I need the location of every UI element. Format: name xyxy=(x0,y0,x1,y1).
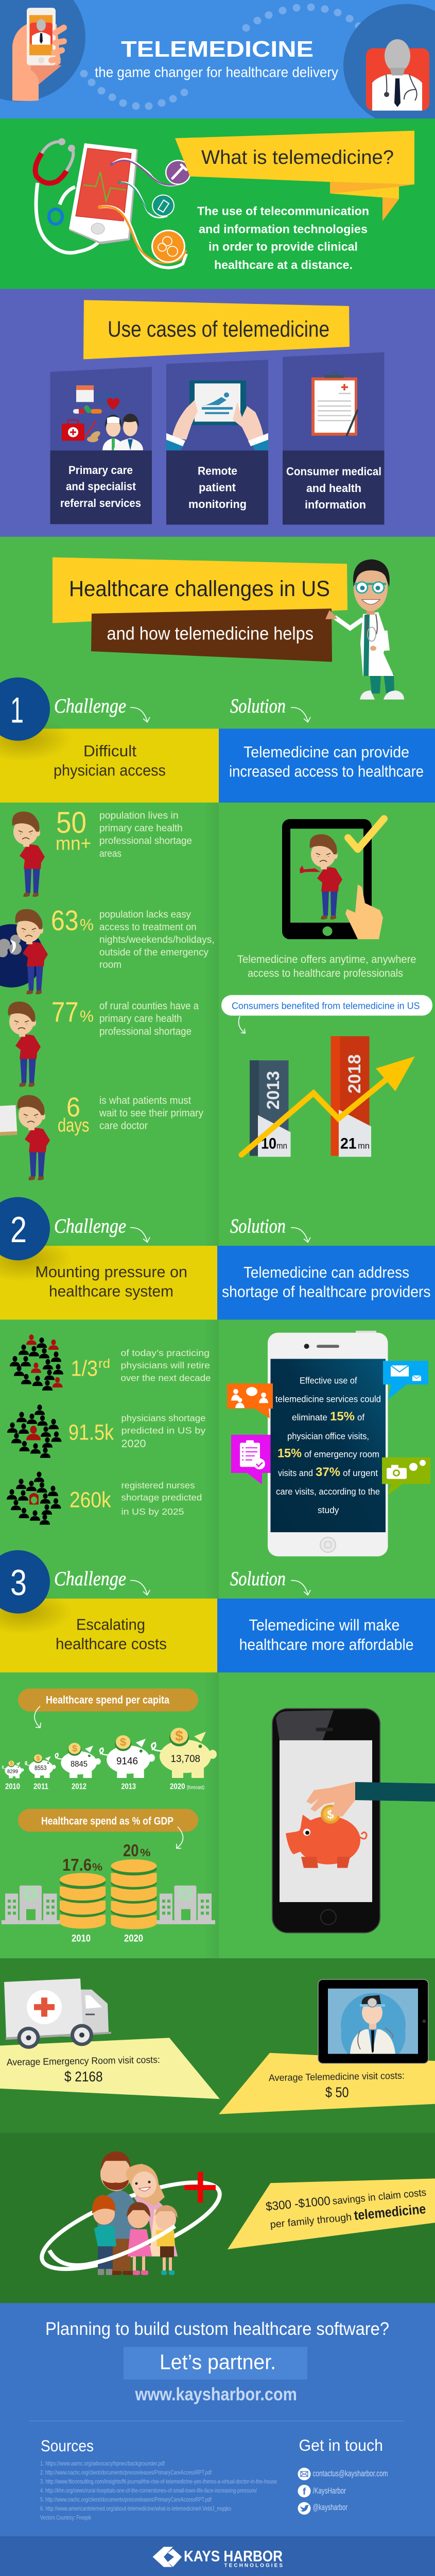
panel: solution 3 xyxy=(217,1599,435,1672)
panel: solution 3: healthcare more affordable xyxy=(239,1636,414,1653)
text: telemedicine offers: Telemedicine offers anytime, anywhere xyxy=(237,953,416,965)
stat: 260k nurses shortage: shortage predicted xyxy=(121,1493,202,1503)
card label: Remote xyxy=(198,464,237,477)
banner: use cases of telemedicine: Use cases of telemedicine xyxy=(108,317,329,342)
icon: hands holding tablet xyxy=(166,380,268,450)
callout: telemedicine cost: $ 50 xyxy=(325,2084,349,2100)
card label xyxy=(60,463,141,510)
phone screen text: of urgent xyxy=(343,1468,378,1478)
card label: information xyxy=(305,498,366,511)
stat: 260k nurses shortage: 260k xyxy=(69,1488,111,1512)
chart: piggy banks per capita spend: 2012 xyxy=(72,1783,86,1791)
card label xyxy=(188,464,247,511)
icon: hospital right xyxy=(156,1886,215,1924)
stat: 6 days: days xyxy=(58,1114,89,1136)
chart: piggy banks per capita spend: 8299 xyxy=(7,1769,18,1774)
stat: 91.5k physicians shortage: predicted in US by xyxy=(121,1426,206,1435)
card label: referral services xyxy=(60,496,141,510)
phone screen text: 15% xyxy=(277,1447,302,1461)
section background: visit costs xyxy=(0,1958,435,2133)
step 3 badge xyxy=(0,1550,50,1614)
section background: call to action xyxy=(0,2303,435,2536)
stat: 63%: % xyxy=(80,916,94,934)
stat: 6 days xyxy=(0,1093,204,1180)
chart: piggy banks per capita spend: $ xyxy=(72,1743,77,1753)
chart: GDP coin stacks with hospitals xyxy=(2,1842,215,1944)
icon: primary care collage xyxy=(62,385,143,450)
chart: consumers 2013 vs 2018: mn xyxy=(358,1141,370,1150)
stat: 91.5k physicians shortage: 2020 xyxy=(121,1437,146,1450)
definition text: The use of telecommunication xyxy=(197,205,369,218)
stat: 1/3rd of physicians: rd xyxy=(98,1357,110,1371)
chart: GDP coin stacks with hospitals: 2010 xyxy=(72,1933,91,1944)
panel: solution 3: Telemedicine will make xyxy=(249,1617,400,1634)
card label xyxy=(286,465,381,511)
phone screen text: Effective use of xyxy=(300,1376,357,1385)
website: www.kaysharbor.com xyxy=(135,2384,297,2404)
card label: Primary care xyxy=(68,463,133,477)
chart: consumers 2013 vs 2018: 21 xyxy=(340,1136,357,1152)
chart: GDP coin stacks with hospitals: 20 xyxy=(123,1842,139,1860)
heading: planning to build: Planning to build custom healthcare software? xyxy=(45,2318,389,2339)
banner: what is telemedicine: What is telemedicine? xyxy=(201,146,394,168)
stat: 63% xyxy=(0,905,215,994)
chart: piggy banks per capita spend: $ xyxy=(120,1736,126,1749)
phone screen text: physician office visits, xyxy=(287,1431,369,1442)
stat: 77% xyxy=(8,996,199,1087)
phone screen text: eliminate xyxy=(292,1412,327,1422)
icon: ambulance xyxy=(4,1978,111,2049)
stat: 6 days: care doctor xyxy=(99,1120,148,1131)
list: source links: 5. http://www.nachc.org/client/documents/pressreleases/PrimaryCareAccessRPT.pdf xyxy=(40,2496,212,2503)
stat: 50 mn+: population lives in xyxy=(99,810,179,821)
stat: 91.5k physicians shortage: physicians shortage xyxy=(121,1413,206,1423)
icon: hand with coin xyxy=(306,1782,435,1817)
icon: feverish patient xyxy=(8,1002,41,1087)
chart: piggy banks per capita spend: (forecast) xyxy=(187,1785,204,1790)
banner: what is telemedicine xyxy=(175,131,414,221)
stat: 50 mn+ xyxy=(12,805,192,897)
step 3 headings: Solution xyxy=(230,1567,286,1590)
stat: 6 days: is what patients must xyxy=(99,1095,191,1106)
chart: piggy banks per capita spend: $ xyxy=(37,1755,40,1762)
contact: twitter xyxy=(298,2502,347,2515)
heading: sources: Sources xyxy=(41,2436,94,2455)
text: telemedicine offers: access to healthcare professionals xyxy=(248,967,403,979)
contact: email: contactus@kaysharbor.com xyxy=(313,2469,388,2478)
text: telemedicine offers xyxy=(237,953,416,979)
stat: 1/3rd of physicians: of today’s practicing xyxy=(121,1348,210,1358)
callout: emergency room cost: Average Emergency Room visit costs: xyxy=(7,2054,160,2067)
panel: solution 2: Telemedicine can address xyxy=(243,1264,409,1281)
chart: piggy banks per capita spend xyxy=(2,1727,217,1791)
callout: consumers benefited xyxy=(221,995,432,1033)
chart: piggy banks per capita spend: 2010 xyxy=(5,1783,20,1791)
chart: consumers 2013 vs 2018: 2013 xyxy=(264,1071,283,1110)
button: let's partner: Let’s partner. xyxy=(160,2350,276,2374)
callout: family savings: savings in claim costs xyxy=(332,2187,427,2207)
bubble: people chat xyxy=(227,1383,273,1418)
phone screen text: telemedicine services could xyxy=(275,1394,381,1404)
icon: waiting patient with calendar xyxy=(0,1095,50,1180)
coin stack 2020 xyxy=(111,1859,156,1929)
banner: healthcare challenges in US xyxy=(53,557,347,662)
card label: monitoring xyxy=(188,497,247,511)
panel: challenge 1 xyxy=(0,716,219,803)
chart: piggy banks per capita spend: 2013 xyxy=(121,1783,136,1791)
header background xyxy=(0,0,435,118)
stat: 6 days: 6 xyxy=(66,1093,80,1123)
stat: 77%: primary care health xyxy=(99,1013,182,1025)
step 1 badge xyxy=(0,677,50,741)
coin stack 2010 xyxy=(60,1873,106,1929)
icon: piggy bank xyxy=(286,1805,367,1868)
card label: and specialist xyxy=(66,480,136,493)
icon: tired patient at night xyxy=(0,909,48,994)
stat: 63%: 63 xyxy=(51,905,78,936)
chart: piggy banks per capita spend: 9146 xyxy=(116,1756,138,1767)
chart: GDP coin stacks with hospitals: % xyxy=(92,1860,102,1873)
step 2 headings xyxy=(54,1215,310,1242)
stat: 91.5k physicians shortage xyxy=(7,1404,206,1458)
panel: challenge 2 xyxy=(0,1236,217,1319)
chart: consumers 2013 vs 2018 xyxy=(241,1036,415,1157)
chart: piggy banks per capita spend: 2020 xyxy=(170,1783,185,1791)
illustration: family with ring and cross xyxy=(32,2151,230,2286)
chart: GDP coin stacks with hospitals: % xyxy=(140,1846,150,1859)
panel: consumer information card xyxy=(283,352,384,524)
phone screen text: of xyxy=(357,1412,364,1422)
stat: 50 mn+: 50 xyxy=(56,805,86,839)
panel: solution 1 xyxy=(219,728,435,803)
list: source links: 3. http://www.fticonsulting.com/insights/fti-journal/the-rise-of-telemedicine-yes-theres-a-virtual-doctor-in-the-house xyxy=(40,2478,277,2485)
stat: 50 mn+: professional shortage xyxy=(99,835,192,846)
stat: 77%: 77 xyxy=(51,996,78,1028)
callout: telemedicine cost xyxy=(219,2053,435,2114)
phone screen text: of emergency room xyxy=(304,1449,379,1460)
pill: healthcare spend as % of GDP: Healthcare spend as % of GDP xyxy=(41,1815,173,1827)
phone screen text xyxy=(275,1376,381,1515)
heading: solution 1 with arrow xyxy=(230,695,310,722)
stat: 77%: of rural counties have a xyxy=(99,1000,199,1012)
stat: 50 mn+: primary care health xyxy=(99,823,183,834)
stat: 1/3rd of physicians: over the next decade xyxy=(121,1373,211,1383)
step 2 headings: Solution xyxy=(230,1215,286,1237)
chart: piggy banks per capita spend: 2011 xyxy=(33,1783,48,1791)
stat: 77%: professional shortage xyxy=(99,1026,192,1037)
logo: kays harbor technologies: TECHNOLOGIES xyxy=(224,2563,283,2568)
panel: challenge 1: Difficult xyxy=(83,742,137,760)
callout: emergency room cost: $ 2168 xyxy=(64,2069,103,2084)
section background: use cases xyxy=(0,289,435,537)
banner: healthcare challenges in US: Healthcare challenges in US xyxy=(69,577,330,601)
step 2 badge xyxy=(0,1197,50,1260)
panel: primary care card xyxy=(50,367,152,524)
card label: patient xyxy=(199,481,236,494)
card label: Consumer medical xyxy=(286,465,381,478)
icon: tablet with doctor xyxy=(318,1979,428,2063)
icon: hospital left xyxy=(2,1886,60,1924)
chart: consumers 2013 vs 2018: 2018 xyxy=(345,1054,364,1094)
stat: 1/3rd of physicians: physicians will retire xyxy=(121,1360,210,1370)
icon: doctor avatar xyxy=(343,4,435,118)
stat: 6 days: wait to see their primary xyxy=(99,1107,204,1119)
definition text xyxy=(197,205,369,272)
illustration: phone with happy patient xyxy=(282,819,384,939)
section background: healthcare challenges xyxy=(0,537,435,1958)
list: source links xyxy=(40,2460,277,2521)
contact: email xyxy=(298,2468,388,2480)
list: source links: 2. http://www.nachc.org/client/documents/pressreleases/PrimaryCareAccessRPT.pdf xyxy=(40,2469,212,2476)
button: let's partner xyxy=(124,2347,307,2380)
callout: consumers benefited: Consumers benefited from telemedicine in US xyxy=(232,1001,420,1011)
chart: piggy banks per capita spend: 8845 xyxy=(71,1760,88,1769)
subtitle: the game changer for healthcare delivery xyxy=(95,64,338,80)
banner: use cases of telemedicine xyxy=(83,300,350,359)
list: source links: Vectors Courtesy: Freepik xyxy=(40,2514,91,2521)
step 3 badge: 3 xyxy=(10,1563,27,1603)
step 1 badge: 1 xyxy=(10,690,24,731)
contact: facebook: /KaysHarbor xyxy=(313,2486,346,2496)
ring front half xyxy=(49,2226,175,2265)
logo: kays harbor technologies: KAYS HARBOR xyxy=(184,2548,283,2565)
callout: family savings xyxy=(228,2178,435,2249)
chart: consumers 2013 vs 2018: mn xyxy=(276,1141,287,1150)
step 2 headings: Challenge xyxy=(54,1215,126,1237)
stat: 1/3rd of physicians: 1/3 xyxy=(71,1357,98,1381)
pill: healthcare spend per capita: Healthcare spend per capita xyxy=(46,1693,170,1706)
stat: 63%: outside of the emergency xyxy=(99,946,208,958)
panel: challenge 2: healthcare system xyxy=(49,1283,173,1300)
logo: kays harbor technologies xyxy=(152,2547,283,2568)
section background: what is telemedicine xyxy=(0,118,435,289)
icon: red cross xyxy=(184,2172,216,2202)
illustration: white smartphone with study text xyxy=(227,1331,430,1556)
callout: emergency room cost xyxy=(0,2038,220,2099)
chart: piggy banks per capita spend: 8553 xyxy=(34,1765,47,1771)
contact: twitter: @kaysharbor xyxy=(313,2502,347,2512)
bubble: mail xyxy=(383,1361,428,1400)
contact: facebook xyxy=(298,2485,346,2497)
chart: piggy banks per capita spend: 13,708 xyxy=(171,1753,200,1765)
definition text: in order to provide clinical xyxy=(208,241,358,254)
stat: 63%: nights/weekends/holidays, xyxy=(99,934,215,945)
callout: family savings: $300 -$1000 xyxy=(265,2194,331,2214)
list: source links: 4. http://khn.org/news/rural-hospitals-one-of-the-cornerstones-of-small-town-life-face-increasing-pressure/ xyxy=(40,2487,257,2494)
definition text: healthcare at a distance. xyxy=(214,259,353,272)
heading: solution 1 with arrow: Solution xyxy=(230,695,286,717)
chart: GDP coin stacks with hospitals: 2020 xyxy=(124,1933,143,1944)
icon: crowd with one physician xyxy=(7,1404,62,1458)
panel: solution 2 xyxy=(217,1246,435,1319)
bubble: camera xyxy=(382,1458,430,1495)
phone screen text: care visits, according to the xyxy=(276,1486,380,1497)
chart: consumers 2013 vs 2018: 10 xyxy=(261,1136,276,1152)
phone screen text: study xyxy=(318,1505,339,1515)
icon: crowd with one nurse xyxy=(7,1471,61,1524)
step 3 headings xyxy=(54,1567,310,1595)
stat: 91.5k physicians shortage: 91.5k xyxy=(68,1420,114,1445)
footer band xyxy=(0,2536,435,2576)
phone screen text: visits and xyxy=(278,1468,313,1478)
bubble: checklist xyxy=(231,1435,271,1484)
callout: telemedicine cost: Average Telemedicine visit costs: xyxy=(269,2070,405,2083)
stat: 1/3rd of physicians xyxy=(10,1334,211,1391)
header: dotted arc decoration xyxy=(80,4,371,110)
panel: remote monitoring card xyxy=(166,360,268,524)
icon: piggy bank: $ xyxy=(327,1808,334,1822)
stat: 260k nurses shortage: in US by 2025 xyxy=(121,1506,184,1517)
column shading xyxy=(203,803,219,1958)
icon: hand holding phone with doctor xyxy=(0,0,85,101)
title: TELEMEDICINE xyxy=(121,37,314,62)
panel: solution 1: Telemedicine can provide xyxy=(243,743,409,761)
heading: challenge 1 with arrow: Challenge xyxy=(54,695,126,717)
icon: patient with stomach ache xyxy=(12,811,45,897)
icon: clipboard xyxy=(311,372,358,436)
heading: get in touch: Get in touch xyxy=(299,2436,383,2454)
phone screen text: 37% xyxy=(316,1465,340,1479)
illustration: black phone with piggy bank xyxy=(272,1708,435,1933)
panel: challenge 3: Escalating xyxy=(76,1616,145,1633)
chart: GDP coin stacks with hospitals: 17.6 xyxy=(62,1856,92,1875)
pill: healthcare spend as % of GDP xyxy=(18,1809,198,1849)
contact: facebook: f xyxy=(303,2486,306,2497)
banner: healthcare challenges in US: and how telemedicine helps xyxy=(107,623,314,644)
illustration: phone with stethoscope and health icons xyxy=(36,138,191,268)
pill: healthcare spend per capita xyxy=(18,1688,198,1727)
stat: 63%: room xyxy=(99,959,121,971)
section background: family savings xyxy=(0,2133,435,2303)
list: source links: 6. http://www.americantelemed.org/about-telemedicine/what-is-telemedicine#.VebtJ_mqqko xyxy=(40,2505,231,2512)
panel: challenge 3 xyxy=(0,1589,217,1672)
stat: 50 mn+: mn+ xyxy=(56,833,91,854)
stat: 63%: access to treatment on xyxy=(99,922,197,933)
stat: 50 mn+: areas xyxy=(99,848,121,859)
stat: 77%: % xyxy=(80,1007,94,1025)
chart: piggy banks per capita spend: $ xyxy=(10,1761,13,1766)
panel: challenge 3: healthcare costs xyxy=(56,1635,167,1653)
ring back half xyxy=(32,2165,230,2286)
panel: challenge 2: Mounting pressure on xyxy=(35,1263,187,1281)
illustration: cartoon doctor xyxy=(325,560,404,700)
definition text: and information technologies xyxy=(199,223,368,236)
callout: family savings: per family through xyxy=(270,2212,352,2230)
card label: and health xyxy=(306,481,361,495)
stat: 260k nurses shortage: registered nurses xyxy=(121,1480,195,1490)
step 2 badge: 2 xyxy=(10,1210,27,1250)
stat: 63%: population lacks easy xyxy=(99,909,191,920)
panel: challenge 1: physician access xyxy=(54,762,166,779)
chart: piggy banks per capita spend: $ xyxy=(175,1728,183,1744)
list: source links: 1. https://www.aamc.org/advocacy/hpnec/backgrounder.pdf xyxy=(40,2460,165,2467)
stat: 260k nurses shortage xyxy=(7,1471,202,1524)
family group xyxy=(92,2151,178,2275)
phone screen text: 15% xyxy=(330,1410,355,1423)
icon: crowd with retiring physicians xyxy=(10,1334,63,1391)
step 3 headings: Challenge xyxy=(54,1567,126,1590)
